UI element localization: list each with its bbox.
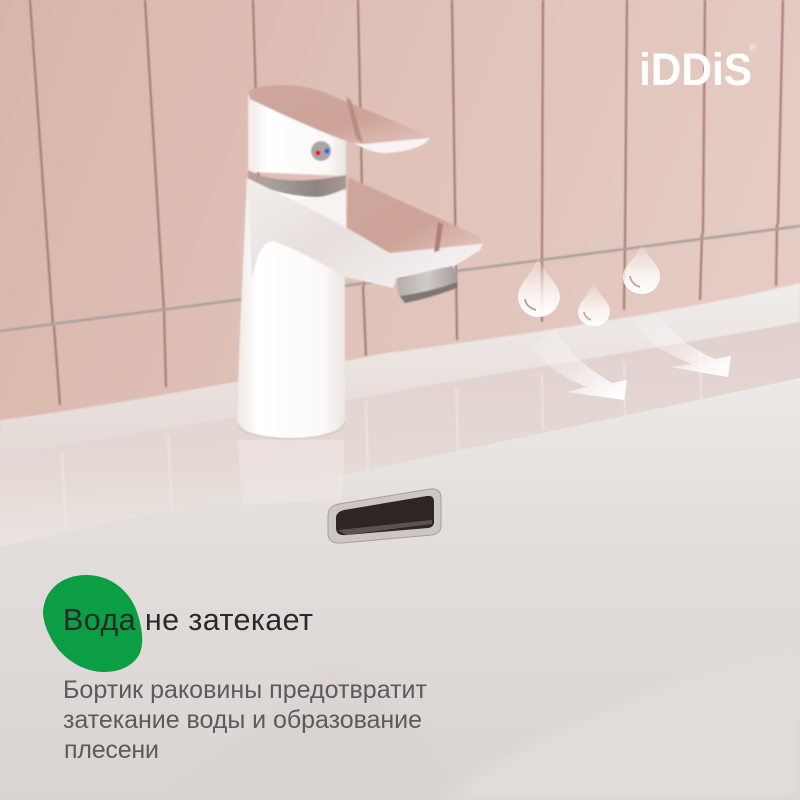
temperature indicator (311, 141, 331, 161)
spout (247, 178, 483, 288)
arrow: right (635, 312, 731, 377)
tiled wall (0, 0, 800, 430)
upper body (248, 92, 346, 176)
basin front face (0, 378, 800, 800)
faucet (237, 85, 483, 505)
logo: iDDiS (639, 44, 752, 95)
arrow: left (532, 327, 627, 400)
heading: Вода не затекает (63, 603, 313, 637)
water drop: large (518, 257, 560, 317)
overflow drain (328, 489, 441, 543)
description text: плесени (64, 736, 159, 764)
description text: Бортик раковины предотвратит (63, 676, 428, 704)
under-ring body (293, 190, 346, 228)
lever chrome top (248, 85, 430, 145)
description text: затекание воды и образование (63, 706, 422, 734)
basin deck (0, 305, 800, 548)
spout mirror top (347, 177, 483, 253)
faucet body (237, 178, 345, 440)
faucet reflection (238, 440, 345, 505)
washbasin (0, 283, 800, 800)
logo: ® (749, 43, 757, 54)
green accent blob (43, 575, 142, 672)
lever lip (354, 138, 430, 153)
water drop: medium (623, 243, 660, 294)
water drop: small (578, 282, 610, 326)
description text (63, 676, 428, 764)
ring (248, 170, 346, 197)
aerator (397, 266, 457, 303)
basin rim (0, 283, 800, 458)
